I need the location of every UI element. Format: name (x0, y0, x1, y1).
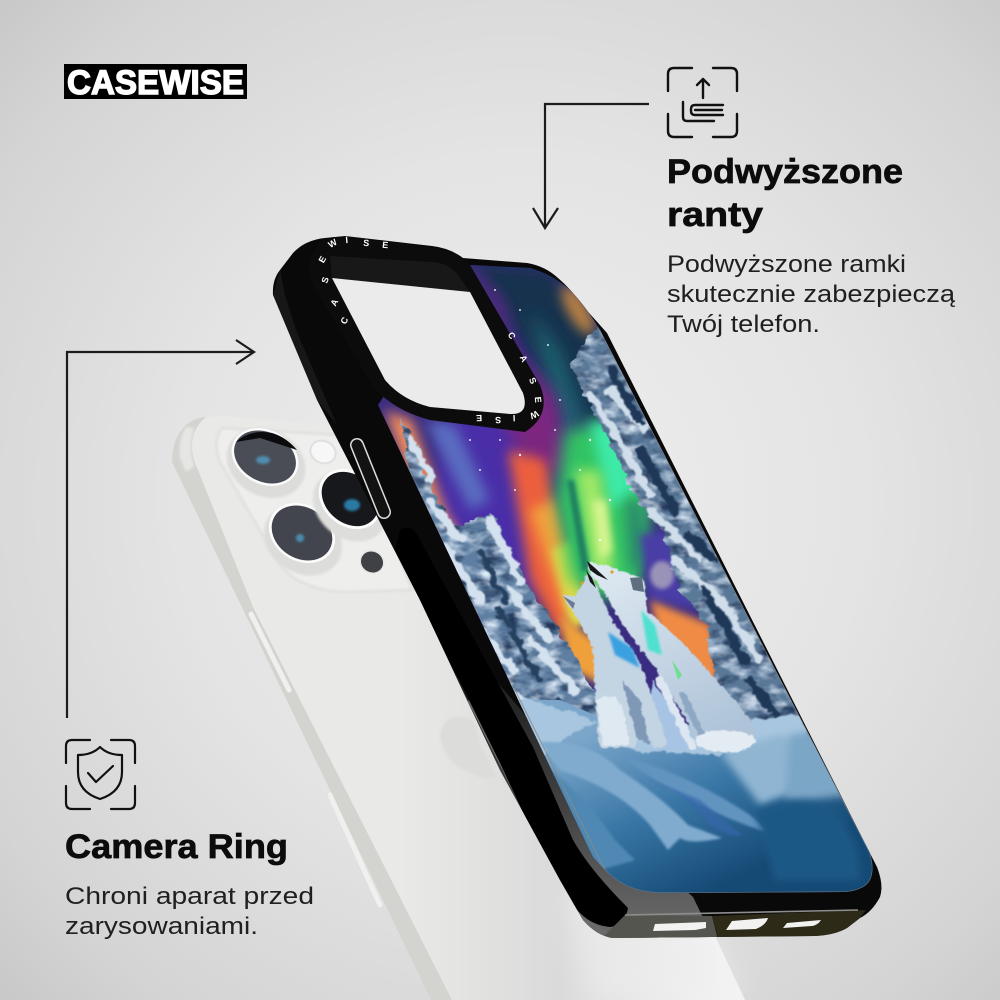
text: camera ring description (65, 883, 314, 940)
CASEWISE ring lettering: W (326, 237, 339, 250)
apple logo (440, 717, 496, 778)
text: raised edges description (667, 251, 956, 338)
right tree branches (590, 370, 790, 735)
CASEWISE ring lettering: E (476, 413, 482, 423)
CASEWISE ring lettering (317, 235, 543, 425)
heading: Podwyższone ranty (667, 153, 903, 234)
text: raised edges description: Podwyższone ramki (667, 251, 906, 278)
white iPhone behind the case (172, 415, 745, 1000)
CASEWISE ring lettering: S (495, 415, 501, 425)
flash (307, 437, 339, 467)
sharp screen edge (510, 330, 872, 893)
heading: Podwyższone ranty: Podwyższone (667, 153, 903, 191)
text: camera ring description: zarysowaniami. (65, 913, 258, 940)
left tree branches (410, 440, 585, 730)
camera ring (309, 235, 544, 432)
heading: Podwyższone ranty: ranty (667, 196, 763, 234)
side buttons (251, 614, 380, 905)
stars (469, 289, 612, 542)
lens cut-out (332, 278, 525, 414)
translucent lower bezel (455, 674, 708, 938)
CASEWISE ring lettering: S (363, 238, 370, 248)
CASEWISE ring lettering: A (518, 353, 530, 364)
bottom lip olive (712, 910, 866, 938)
CASEWISE ring lettering: S (527, 376, 539, 386)
CASEWISE ring lettering: C (338, 315, 351, 326)
lens top (214, 415, 318, 511)
CASEWISE ring lettering: I (345, 235, 348, 245)
icon: shield with check (66, 740, 135, 809)
aurora wolves artwork on screen (370, 260, 890, 900)
wolves (562, 562, 757, 752)
CASEWISE ring lettering: C (506, 330, 518, 341)
side slot (395, 528, 628, 927)
volume button capsule (357, 445, 384, 512)
CASEWISE ring lettering: E (317, 254, 328, 265)
text: camera ring description: Chroni aparat przed (65, 883, 314, 910)
snow ground (518, 698, 872, 893)
camera plateau (216, 428, 412, 592)
outer left edge sheen (470, 700, 700, 938)
logo: CASEWISE: CASEWISE (67, 64, 244, 102)
tail (695, 730, 755, 752)
lens right (299, 456, 401, 556)
microphone (356, 546, 388, 578)
heading: Camera Ring: Camera Ring (65, 828, 288, 866)
CASEWISE ring lettering: A (328, 297, 341, 308)
back wolf (587, 560, 750, 736)
aurora sky (385, 262, 720, 690)
black phone case (273, 236, 881, 945)
icon: raised edge (668, 68, 737, 137)
lens bottom (251, 490, 355, 590)
text: raised edges description: Twój telefon. (667, 311, 820, 338)
arrow: camera ring pointer (67, 340, 254, 718)
right snowy trees (570, 320, 880, 860)
arrow: raised edges pointer (533, 104, 649, 228)
fur details (563, 561, 682, 680)
bottom lip grey (604, 915, 718, 938)
CASEWISE ring lettering: W (528, 408, 540, 421)
CASEWISE ring lettering: E (533, 396, 543, 403)
CASEWISE ring lettering: S (319, 276, 331, 284)
back wolf legs (660, 680, 708, 746)
gap between legs (650, 680, 677, 750)
CASEWISE ring lettering: E (382, 240, 389, 250)
CASEWISE ring lettering: I (513, 413, 516, 423)
left snowy trees (400, 415, 612, 780)
text: raised edges description: skutecznie zabezpieczą (667, 281, 956, 308)
charging port and speaker holes (653, 918, 821, 931)
front wolf (562, 572, 668, 748)
